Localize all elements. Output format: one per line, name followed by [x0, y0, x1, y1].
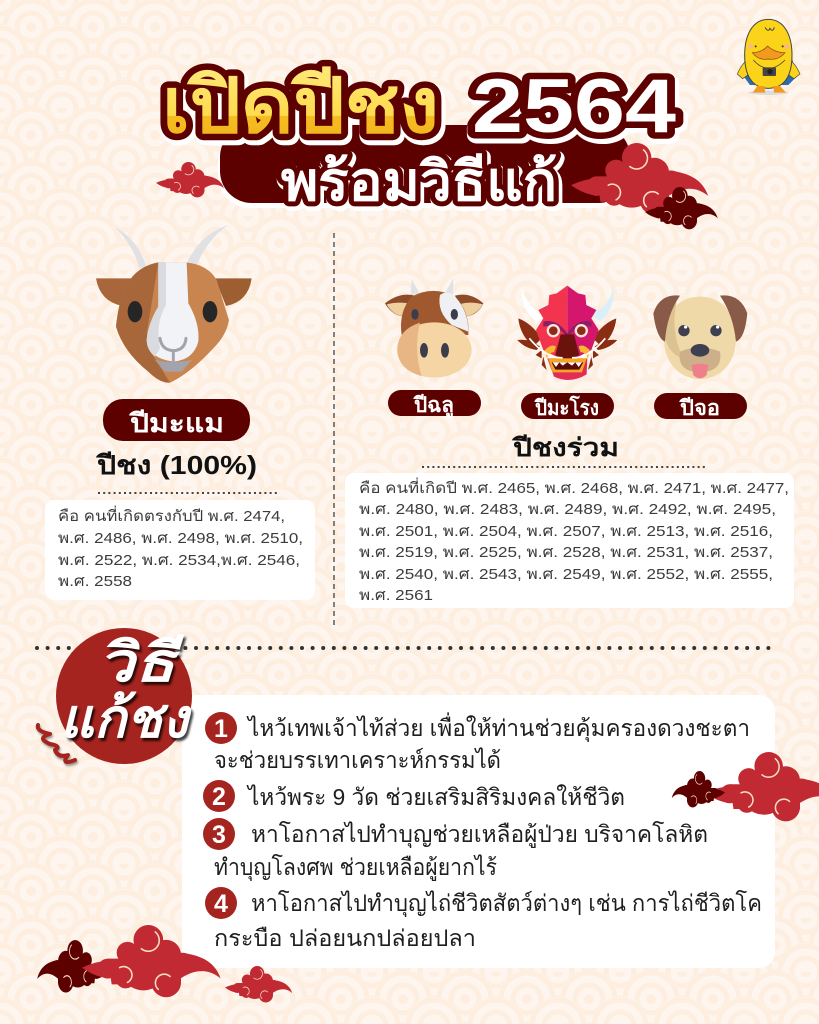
- item 4: [205, 887, 762, 951]
- pill: ox: [388, 390, 481, 419]
- text: heading: แก้ชง: [60, 689, 193, 749]
- card: goat years: คือ คนที่เกิดตรงกับปี พ.ศ. 2474,: [58, 505, 285, 525]
- vertical dashed divider: [333, 233, 335, 628]
- item 1: [205, 712, 750, 773]
- title banner: [218, 125, 630, 208]
- panel: co-clash years: [345, 278, 794, 608]
- title year: 2564: [472, 64, 676, 149]
- icon: goat: [96, 225, 252, 383]
- icon: dragon: [517, 286, 617, 380]
- card: goat years: [45, 500, 315, 600]
- title year: 2564: [472, 64, 676, 149]
- card: goat years: พ.ศ. 2558: [58, 573, 132, 590]
- pill: year of goat: ปีมะแม: [129, 408, 224, 438]
- item 3: หาโอกาสไปทำบุญช่วยเหลือผู้ป่วย บริจาคโลหิต: [251, 821, 708, 848]
- item 1: จะช่วยบรรเทาเคราะห์กรรมได้: [214, 747, 501, 773]
- card: goat years: พ.ศ. 2522, พ.ศ. 2534,พ.ศ. 2546,: [58, 552, 300, 569]
- card: co-clash years: พ.ศ. 2501, พ.ศ. 2504, พ.ศ. 2507, พ.ศ. 2513, พ.ศ. 2516,: [359, 523, 773, 540]
- card: goat years: พ.ศ. 2486, พ.ศ. 2498, พ.ศ. 2510,: [58, 530, 303, 547]
- item 2: ไหว้พระ 9 วัด ช่วยเสริมสิริมงคลให้ชีวิต: [246, 784, 625, 810]
- item 4: 4: [214, 890, 228, 918]
- panel: remedies card: [182, 695, 775, 968]
- pill: dragon: [521, 393, 614, 420]
- item 3: [203, 818, 708, 881]
- title line 1 yellow: เปิดปีชง: [162, 64, 439, 149]
- item 4: กระบือ ปล่อยนกปล่อยปลา: [214, 925, 476, 951]
- panel: main clash goat: [45, 225, 315, 600]
- card: co-clash years: คือ คนที่เกิดปี พ.ศ. 2465, พ.ศ. 2468, พ.ศ. 2471, พ.ศ. 2477,: [359, 477, 789, 497]
- card: co-clash years: พ.ศ. 2561: [359, 587, 433, 604]
- text: heading: วิธี: [97, 633, 185, 693]
- title year: 2564: [474, 67, 678, 152]
- pill: dog: ปีจอ: [678, 396, 720, 420]
- heading: 100 percent: ปีชง (100%): [96, 450, 257, 480]
- title line 2: พร้อมวิธีแก้: [281, 152, 557, 212]
- clouds beside title: [156, 143, 718, 229]
- pill: year of goat: [103, 399, 250, 441]
- badge: remedies heading: [56, 628, 193, 764]
- item 2: 2: [212, 783, 226, 811]
- title line 2: พร้อมวิธีแก้: [283, 155, 559, 215]
- title: [162, 64, 678, 215]
- icon: dog: [653, 295, 747, 379]
- card: co-clash years: [345, 473, 794, 608]
- duck mascot: [737, 19, 800, 95]
- heading: co-clash: ปีชงร่วม: [511, 434, 619, 462]
- card: co-clash years: พ.ศ. 2540, พ.ศ. 2543, พ.ศ. 2549, พ.ศ. 2552, พ.ศ. 2555,: [359, 566, 773, 583]
- pill: ox: ปีฉลู: [412, 393, 454, 419]
- pill: dragon: ปีมะโรง: [533, 395, 599, 420]
- card: co-clash years: พ.ศ. 2519, พ.ศ. 2525, พ.ศ. 2528, พ.ศ. 2531, พ.ศ. 2537,: [359, 544, 773, 561]
- item 3: 3: [212, 821, 226, 849]
- squiggle: [38, 725, 75, 762]
- icon: ox: [385, 278, 483, 378]
- title line 1 yellow: เปิดปีชง: [162, 64, 439, 149]
- clouds: bottom left: [37, 925, 292, 1002]
- item 1: ไหว้เทพเจ้าไท้ส่วย เพื่อให้ท่านช่วยคุ้มครองดวงชะตา: [246, 712, 750, 742]
- list: remedies: [203, 712, 762, 951]
- item 4: หาโอกาสไปทำบุญไถ่ชีวิตสัตว์ต่างๆ เช่น การไถ่ชีวิตโค: [251, 890, 762, 917]
- item 3: ทำบุญโลงศพ ช่วยเหลือผู้ยากไร้: [214, 854, 497, 881]
- horizontal dotted divider: [37, 646, 776, 650]
- item 1: 1: [214, 715, 228, 743]
- title line 2: พร้อมวิธีแก้: [281, 152, 557, 212]
- text: heading: [60, 633, 193, 749]
- cloud: right of remedies: [672, 752, 819, 821]
- title line 1 yellow: เปิดปีชง: [164, 67, 441, 152]
- card: co-clash years: พ.ศ. 2480, พ.ศ. 2483, พ.ศ. 2489, พ.ศ. 2492, พ.ศ. 2495,: [359, 501, 776, 518]
- pill: dog: [654, 393, 747, 420]
